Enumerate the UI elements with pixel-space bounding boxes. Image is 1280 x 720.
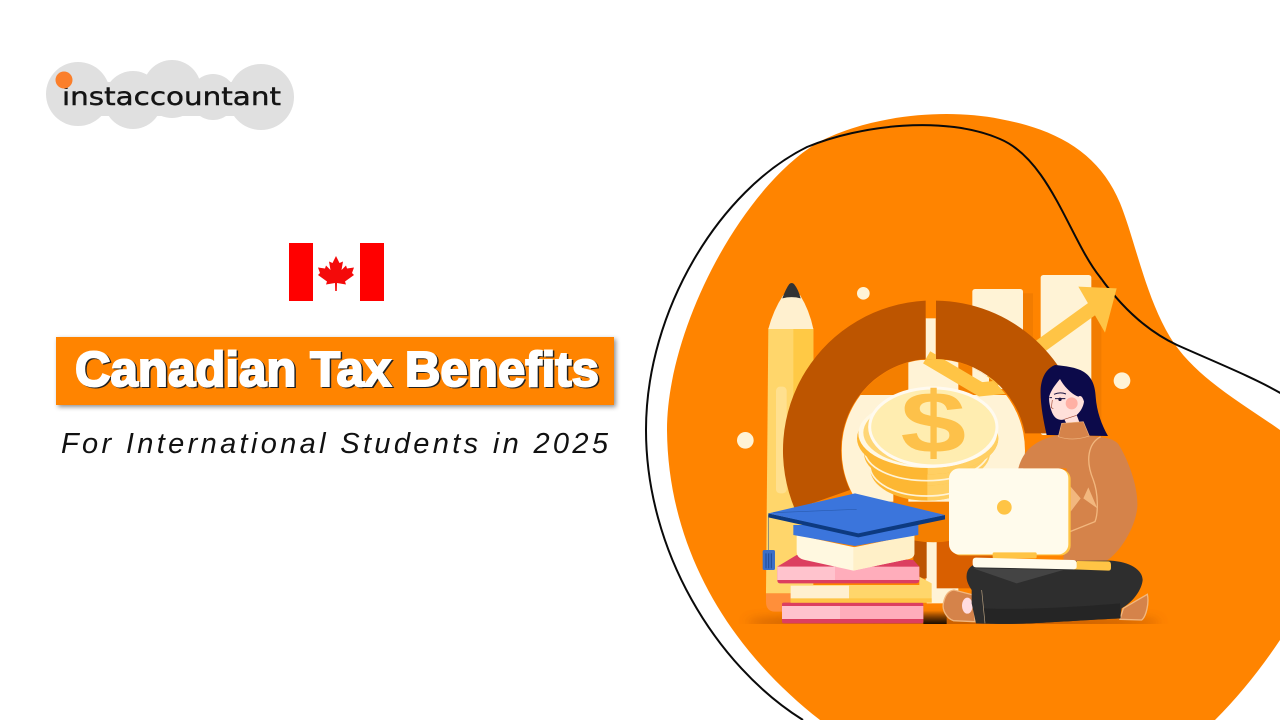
ankle xyxy=(962,598,973,614)
illustration: student with tax and finance symbols xyxy=(737,275,1160,629)
hands xyxy=(1037,564,1057,573)
graduation cap xyxy=(763,493,945,571)
legs xyxy=(967,561,1143,624)
ground shadow xyxy=(748,610,1158,624)
turtleneck xyxy=(1058,422,1089,439)
face xyxy=(1049,379,1084,424)
logo: instaccountant xyxy=(46,60,294,130)
eye xyxy=(1058,398,1062,401)
growth arrow xyxy=(927,287,1117,389)
subtitle: For International Students in 2025 xyxy=(61,428,609,460)
book stack xyxy=(777,555,932,623)
logo: instaccountant: instaccountant xyxy=(62,82,281,111)
dollar sign: $ xyxy=(901,374,966,471)
icon: Canadian flag xyxy=(289,243,384,301)
eyes and brow xyxy=(1049,393,1066,399)
orange blob xyxy=(667,114,1280,720)
left foot xyxy=(943,590,975,622)
woman xyxy=(943,365,1148,624)
black outline curve xyxy=(646,125,1280,720)
title banner: Canadian Tax Benefits xyxy=(76,344,600,398)
donut centre xyxy=(842,357,1025,542)
bar chart columns xyxy=(908,275,1101,603)
nose and jaw xyxy=(1051,400,1077,419)
cheek xyxy=(1066,397,1078,409)
right foot xyxy=(1120,594,1148,620)
laptop xyxy=(949,468,1111,571)
title banner: Canadian Tax Benefits xyxy=(75,343,599,397)
decorative dots xyxy=(737,287,1130,449)
pencil xyxy=(766,283,813,612)
sweater xyxy=(1018,435,1137,562)
donut chart xyxy=(783,301,1083,509)
coin stack xyxy=(857,374,998,501)
hair xyxy=(1041,365,1108,436)
